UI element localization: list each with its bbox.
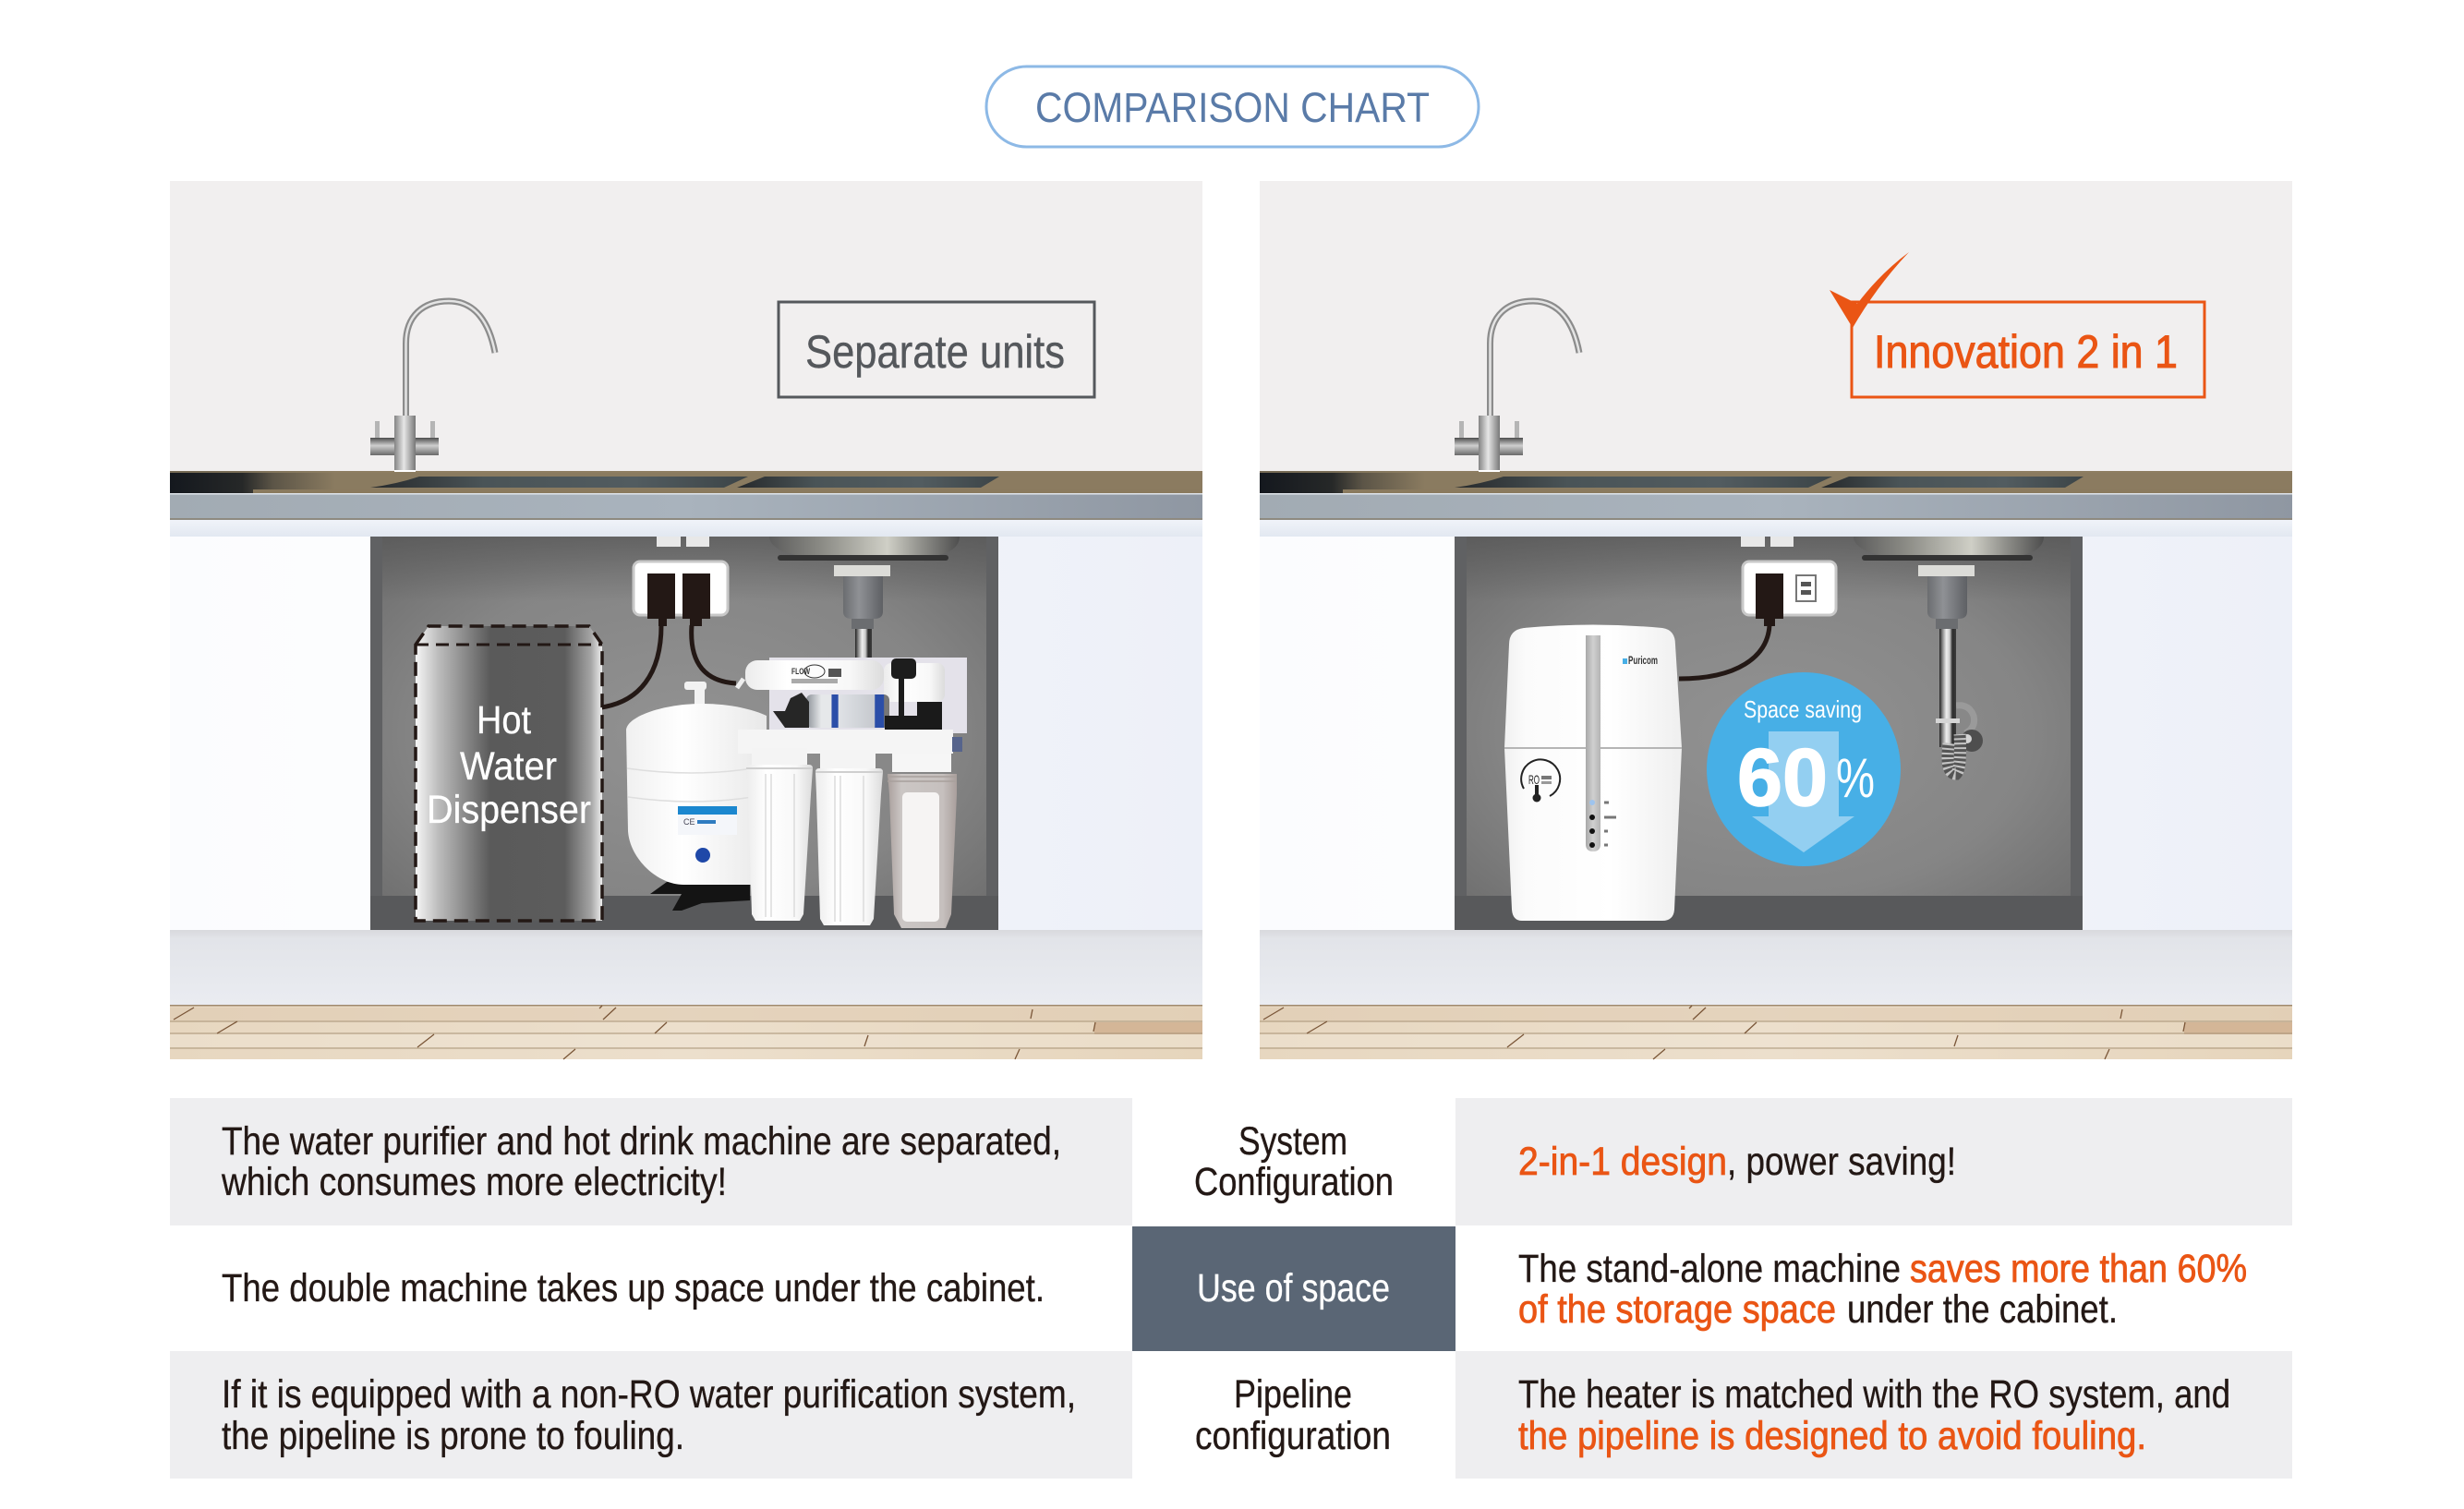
row 2 left: The double machine takes up space under the cabinet. — [222, 1266, 1045, 1310]
label: innovation 2 in 1 — [1852, 302, 2204, 397]
callout: space saving 60%: Space saving — [1744, 695, 1862, 723]
pipeline configuration: configuration — [1195, 1414, 1391, 1458]
row 2 right: The stand-alone machine — [1518, 1247, 1901, 1291]
title: COMPARISON CHART — [1035, 84, 1430, 131]
hot water dispenser: Hot — [477, 698, 531, 742]
row 2 right — [1455, 1225, 2292, 1351]
row 3 left: If it is equipped with a non-RO water purification system, — [222, 1372, 1076, 1417]
2-in-1 water purifier: Puricom — [1628, 654, 1658, 667]
callout: space saving 60%: % — [1836, 747, 1875, 809]
2-in-1 water purifier: RO — [1528, 772, 1540, 787]
power socket with one plug — [1679, 561, 1836, 679]
row 3 right — [1455, 1351, 2292, 1479]
system configuration: System — [1238, 1119, 1347, 1164]
use of space: Use of space — [1197, 1266, 1390, 1310]
system configuration — [1132, 1098, 1455, 1225]
row 3 right: the pipeline is designed to avoid fouling. — [1518, 1414, 2146, 1458]
row 1 right — [1455, 1098, 2292, 1225]
hot water dispenser: Dispenser — [427, 788, 591, 832]
row 3 left: the pipeline is prone to fouling. — [222, 1414, 684, 1458]
drain pipe with valve — [1936, 629, 1983, 774]
row 2 left — [170, 1225, 1132, 1351]
RO water purifier unit: FLOW — [791, 667, 810, 676]
row 3 right: The heater is matched with the RO system, and — [1518, 1372, 2230, 1417]
title — [986, 66, 1479, 147]
row 1 left: The water purifier and hot drink machine are separated, — [222, 1119, 1061, 1164]
system configuration: Configuration — [1194, 1160, 1394, 1204]
label: innovation 2 in 1: Innovation 2 in 1 — [1874, 326, 2178, 378]
row 2 right: under the cabinet. — [1847, 1287, 2118, 1332]
label: separate units: Separate units — [805, 326, 1065, 378]
hot water dispenser — [416, 626, 602, 921]
2-in-1 water purifier — [1504, 624, 1682, 921]
table: middle column — [1132, 1098, 1455, 1479]
use of space — [1132, 1226, 1455, 1351]
panel: separate units — [170, 181, 1202, 1479]
panel: innovation 2 in 1 — [1260, 181, 2292, 1479]
pipeline configuration — [1132, 1351, 1455, 1479]
RO water purifier unit: CE — [683, 817, 695, 827]
callout: space saving 60% — [1707, 672, 1901, 866]
hot water dispenser: Water — [460, 744, 557, 789]
table: right column — [1455, 1098, 2292, 1479]
row 1 right: , power saving! — [1727, 1140, 1956, 1184]
row 1 left — [170, 1098, 1132, 1225]
RO water purifier unit — [626, 658, 967, 928]
row 1 right: 2-in-1 design — [1518, 1140, 1727, 1184]
callout: space saving 60%: 60 — [1737, 731, 1828, 823]
power socket with two plugs — [601, 561, 736, 707]
row 2 right: saves more than 60% — [1910, 1247, 2247, 1291]
row 1 left: which consumes more electricity! — [221, 1160, 727, 1204]
label: separate units — [779, 302, 1094, 397]
chrome drain pipe — [855, 629, 872, 660]
row 2 right: of the storage space — [1518, 1287, 1836, 1332]
row 3 left — [170, 1351, 1132, 1479]
icon: check mark — [1830, 252, 1909, 328]
table: left column — [170, 1098, 1132, 1479]
pipeline configuration: Pipeline — [1234, 1372, 1352, 1417]
